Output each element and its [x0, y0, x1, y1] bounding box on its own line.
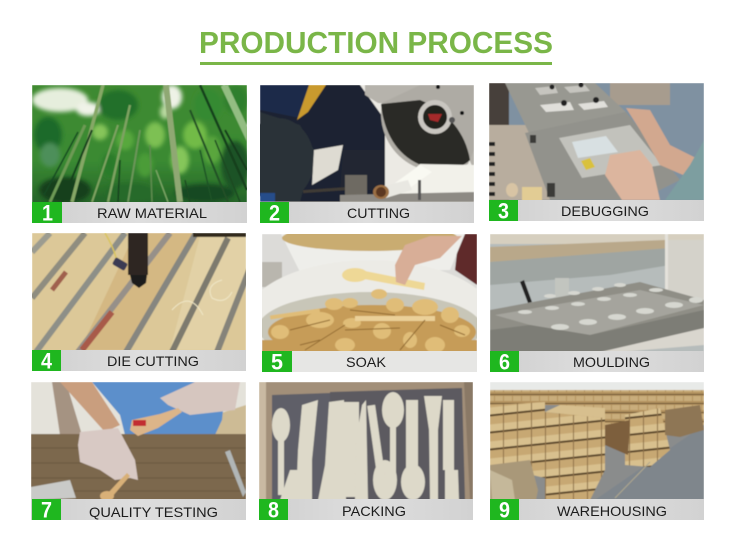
panel 5: soak — [262, 234, 477, 372]
number badge: 9 — [499, 498, 510, 522]
caption text: DIE CUTTING — [107, 353, 199, 369]
photo: cutlery packed in a carton — [259, 382, 473, 500]
number badge: 7 — [41, 498, 52, 522]
caption text: CUTTING — [347, 205, 410, 221]
number badge: 2 — [269, 200, 280, 226]
panel 6: moulding — [490, 234, 704, 374]
number badge: 1 — [42, 200, 53, 226]
photo: moulding machine — [490, 234, 704, 351]
title: PRODUCTION PROCESS — [199, 25, 553, 60]
photo: warehouse carton stacks — [490, 382, 704, 500]
caption bar — [62, 202, 247, 223]
number badge — [490, 498, 519, 522]
number badge — [490, 351, 519, 372]
number badge: 6 — [499, 350, 510, 374]
caption bar — [490, 499, 704, 520]
number badge — [489, 200, 518, 221]
number badge — [260, 202, 289, 223]
number badge: 5 — [271, 350, 283, 374]
caption bar — [292, 351, 477, 372]
caption bar — [519, 351, 704, 372]
number badge — [32, 202, 62, 223]
photo: bamboo forest — [32, 85, 247, 202]
photo: soaking cutlery in a bucket — [262, 234, 477, 351]
caption text: PACKING — [342, 503, 406, 519]
number badge — [32, 350, 61, 371]
caption bar — [61, 350, 246, 371]
photo: gloved hands testing a spoon — [31, 382, 246, 501]
panel 8: packing — [259, 382, 473, 522]
panel 7: quality testing — [31, 382, 246, 522]
caption text: DEBUGGING — [561, 203, 649, 219]
number badge: 4 — [41, 348, 53, 374]
photo: cut-off saw — [260, 85, 474, 202]
number badge: 8 — [268, 498, 279, 522]
caption bar — [288, 499, 473, 520]
caption bar — [518, 200, 704, 221]
number badge — [259, 499, 288, 520]
caption text: QUALITY TESTING — [89, 504, 218, 520]
caption bar — [31, 499, 246, 520]
caption text: WAREHOUSING — [557, 503, 667, 519]
number badge — [262, 351, 292, 372]
number badge: 3 — [498, 198, 509, 224]
caption text: SOAK — [346, 354, 387, 370]
panel 4: die cutting — [32, 233, 250, 374]
photo: laser cutter on bamboo sheets — [32, 233, 246, 350]
caption text: MOULDING — [573, 354, 650, 370]
caption bar — [289, 202, 474, 223]
panel 1: raw material — [32, 85, 250, 226]
panel 3: debugging — [489, 82, 704, 224]
photo: control panel — [489, 83, 704, 200]
panel 9: warehousing — [490, 382, 704, 522]
panel 2: cutting — [242, 85, 474, 226]
caption text: RAW MATERIAL — [97, 205, 207, 221]
number badge — [32, 499, 61, 520]
